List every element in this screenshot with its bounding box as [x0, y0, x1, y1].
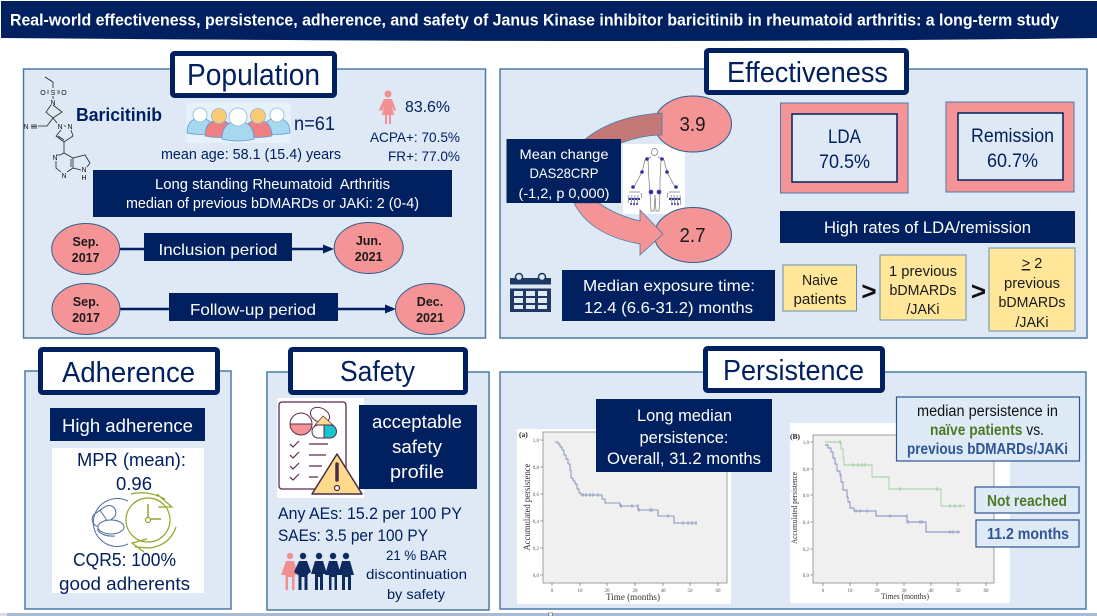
stat: n=61: n=61 — [294, 114, 335, 135]
heading: effectiveness: Effectiveness — [727, 57, 888, 89]
card: adherence metrics — [52, 448, 204, 594]
stat: any AEs: Any AEs: 15.2 per 100 PY — [278, 504, 462, 523]
box: two or more previous: /JAKi — [1016, 315, 1048, 331]
timeline: inclusion period: 2017 — [72, 251, 100, 265]
chart: overall persistence curve: 0,4 — [533, 520, 540, 525]
callout: median exposure: 12.4 (6.6-31.2) months — [584, 300, 753, 317]
note: discontinuation — [366, 547, 467, 602]
result: not reached: Not reached — [987, 493, 1067, 510]
symbol: greater than: > — [861, 276, 877, 306]
callout: high rates: High rates of LDA/remission — [824, 219, 1031, 237]
chart: persistence by prior treatment: 50 — [956, 589, 961, 594]
chart: overall persistence curve: 0,6 — [533, 493, 540, 498]
icon: baricitinib molecule: H — [81, 175, 87, 182]
chart: persistence by prior treatment: 0,4 — [803, 521, 810, 526]
chart: overall persistence curve: 60 — [716, 589, 721, 594]
panel: adherence — [25, 350, 231, 609]
chart: overall persistence curve: 1,0 — [533, 439, 540, 444]
note: discontinuation: discontinuation — [366, 566, 467, 582]
chart: overall persistence curve: 30 — [632, 589, 638, 594]
callout: long standing RA: median of previous bDMARDs or JAKi: 2 (0-4) — [126, 196, 419, 212]
card: adherence metrics: 0.96 — [116, 474, 152, 494]
symbol: greater than: > — [971, 276, 986, 306]
stat: FR: FR+: 77.0% — [388, 148, 460, 164]
note: discontinuation: by safety — [387, 586, 445, 602]
callout: mean change: DAS28CRP — [530, 165, 598, 181]
callout: mean change: Mean change — [520, 146, 609, 162]
icon: baricitinib molecule: N — [57, 124, 63, 131]
title banner — [1, 1, 1097, 41]
chart: overall persistence curve: 0 — [551, 589, 554, 594]
icon: baricitinib molecule: N — [23, 124, 29, 131]
note: discontinuation: 21 % BAR — [386, 547, 447, 563]
arrow: upper curved band — [583, 113, 662, 145]
callout: high adherence: High adherence — [62, 415, 193, 436]
chart: overall persistence curve: 20 — [604, 589, 610, 594]
icon: baricitinib molecule: O — [40, 90, 46, 97]
metric: DAS28 final — [654, 208, 732, 262]
metric: LDA: 70.5% — [819, 152, 870, 173]
icon: baricitinib molecule — [23, 77, 90, 182]
chart: persistence by prior treatment: 30 — [902, 589, 907, 594]
heading: adherence: Adherence — [62, 357, 195, 389]
timeline: follow-up period: Follow-up period — [190, 302, 316, 319]
chart: persistence by prior treatment: Accumulated persistence — [789, 472, 799, 544]
chart: persistence by prior treatment: 0,8 — [803, 468, 810, 473]
heading: adherence — [40, 350, 218, 392]
chart: persistence by prior treatment: 0,6 — [803, 494, 810, 499]
chart: overall persistence curve: Accumulated persistence — [522, 464, 532, 550]
callout: long median persistence — [596, 399, 772, 472]
title banner: Real-world effectiveness, persistence, adherence, and safety of Janus Kinase inhibitor baricitinib in rheumatoid arthritis: a long-term study — [10, 12, 1060, 30]
heading: persistence — [706, 348, 882, 390]
chart: overall persistence curve: (a) — [519, 430, 528, 439]
timeline: follow-up period: Sep. — [73, 295, 99, 309]
stat: SAEs: SAEs: 3.5 per 100 PY — [278, 526, 428, 545]
box: naive patients: Naive — [802, 273, 838, 289]
panel: safety — [267, 350, 489, 610]
icon: baricitinib molecule: S — [51, 90, 56, 97]
label: baricitinib: Baricitinib — [76, 105, 162, 125]
icon: patient group — [186, 103, 291, 143]
timeline: inclusion period — [52, 222, 403, 274]
chart: overall persistence curve: 50 — [688, 589, 693, 594]
heading: population: Population — [187, 57, 320, 92]
timeline: inclusion period: 2021 — [355, 250, 383, 264]
heading: safety — [290, 350, 466, 392]
timeline: inclusion period: Inclusion period — [158, 242, 278, 259]
metric: DAS28 baseline — [654, 96, 732, 152]
timeline: follow-up period: 2017 — [72, 311, 100, 325]
chart: persistence by prior treatment: 0 — [822, 589, 825, 594]
icon: baricitinib molecule: N — [50, 100, 56, 107]
chart: persistence by prior treatment: (B) — [790, 432, 800, 441]
chart: persistence by prior treatment: 1,0 — [803, 441, 810, 446]
icon: pills and clock — [89, 493, 176, 552]
footer strip — [0, 613, 1097, 616]
metric: remission — [946, 102, 1074, 192]
chart: persistence by prior treatment: 40 — [928, 589, 934, 594]
card: adherence metrics: good adherents — [59, 574, 190, 594]
result: not reached — [975, 487, 1079, 513]
chart: overall persistence curve: Time (months) — [606, 592, 660, 602]
panel: persistence — [500, 348, 1086, 609]
metric: DAS28 final: 2.7 — [680, 225, 706, 247]
callout: median exposure: Median exposure time: — [583, 278, 755, 295]
chart: persistence by prior treatment — [789, 423, 1010, 603]
card: adherence metrics: CQR5: 100% — [73, 550, 176, 570]
callout: mean change: (-1,2, p 0,000) — [518, 185, 610, 201]
callout: acceptable safety profile: profile — [390, 461, 444, 482]
chart: overall persistence curve: 0,8 — [533, 466, 540, 471]
card: adherence metrics: MPR (mean): — [77, 450, 186, 470]
box: naive patients — [783, 265, 856, 311]
chart: overall persistence curve: 40 — [660, 589, 666, 594]
callout: long standing RA: Long standing Rheumatoid Arthritis — [155, 177, 390, 193]
callout: long standing RA — [93, 170, 452, 217]
callout: median persistence comparison: previous bDMARDs/JAKi — [907, 441, 1068, 458]
callout: acceptable safety profile: acceptable — [372, 411, 462, 432]
chart: persistence by prior treatment: 10 — [848, 589, 853, 594]
box: one previous: bDMARDs — [890, 283, 956, 299]
callout: long median persistence: Long median — [637, 407, 732, 425]
callout: long median persistence: persistence: — [640, 429, 728, 447]
icon: body joints figure — [623, 144, 685, 214]
callout: long median persistence: Overall, 31.2 months — [607, 450, 761, 468]
chart: persistence by prior treatment: 0,2 — [803, 548, 810, 553]
box: two or more previous — [989, 248, 1075, 331]
chart: overall persistence curve: 0,0 — [533, 574, 540, 579]
result: 11.2 months: 11.2 months — [987, 526, 1069, 543]
metric: LDA: LDA — [828, 127, 861, 148]
box: one previous — [880, 255, 966, 320]
callout: high rates — [780, 211, 1075, 243]
icon: baricitinib molecule: O — [61, 90, 67, 97]
metric: DAS28 baseline: 3.9 — [680, 114, 706, 136]
metric: remission: Remission — [971, 126, 1054, 147]
callout: mean change — [506, 139, 621, 203]
chart: overall persistence curve: 10 — [578, 589, 583, 594]
timeline: follow-up period: 2021 — [416, 311, 444, 325]
callout: acceptable safety profile: safety — [392, 436, 443, 457]
timeline: inclusion period: Sep. — [72, 235, 99, 249]
box: one previous: /JAKi — [906, 302, 940, 318]
stat: female percentage: 83.6% — [405, 99, 450, 116]
heading: persistence: Persistence — [723, 355, 864, 387]
metric: remission: 60.7% — [987, 151, 1038, 172]
arrow: lower curved arrow — [574, 203, 663, 255]
box: two or more previous: previous — [1004, 276, 1060, 292]
callout: acceptable safety profile — [359, 405, 477, 489]
chart: persistence by prior treatment: 0,0 — [803, 574, 810, 579]
icon: baricitinib molecule: N — [52, 155, 58, 162]
box: two or more previous: > 2 — [1022, 256, 1042, 272]
metric: LDA — [780, 103, 908, 193]
panel: effectiveness — [500, 50, 1087, 338]
heading: safety: Safety — [340, 356, 415, 388]
stat: ACPA: ACPA+: 70.5% — [370, 129, 460, 145]
icon: calendar — [510, 274, 551, 312]
heading: effectiveness — [706, 50, 906, 92]
chart: overall persistence curve — [517, 429, 731, 604]
stat: mean age: mean age: 58.1 (15.4) years — [161, 147, 341, 163]
icon: people discontinuation — [281, 553, 354, 590]
panel: population — [23, 54, 486, 338]
icon: woman — [379, 90, 396, 124]
chart: overall persistence curve: 0,2 — [533, 547, 540, 552]
icon: medication checklist warning — [277, 398, 364, 498]
chart: persistence by prior treatment: 60 — [984, 589, 989, 594]
callout: median persistence comparison: median persistence in — [917, 403, 1058, 420]
result: 11.2 months — [976, 520, 1079, 547]
icon: baricitinib molecule: N — [61, 173, 67, 180]
callout: median exposure — [562, 270, 775, 321]
icon: baricitinib molecule: N — [81, 167, 87, 174]
box: naive patients: patients — [794, 292, 846, 308]
callout: high adherence — [50, 408, 205, 441]
timeline: inclusion period: Jun. — [356, 234, 382, 248]
chart: persistence by prior treatment: 20 — [874, 589, 880, 594]
timeline: follow-up period — [52, 284, 464, 334]
box: one previous: 1 previous — [889, 264, 957, 280]
icon: baricitinib molecule: N — [67, 124, 73, 131]
box: two or more previous: bDMARDs — [998, 295, 1066, 311]
callout: median persistence comparison: naïve patients vs. — [930, 422, 1044, 439]
callout: median persistence comparison — [896, 397, 1080, 461]
chart: persistence by prior treatment: Times (months) — [881, 591, 929, 601]
timeline: follow-up period: Dec. — [417, 295, 443, 309]
